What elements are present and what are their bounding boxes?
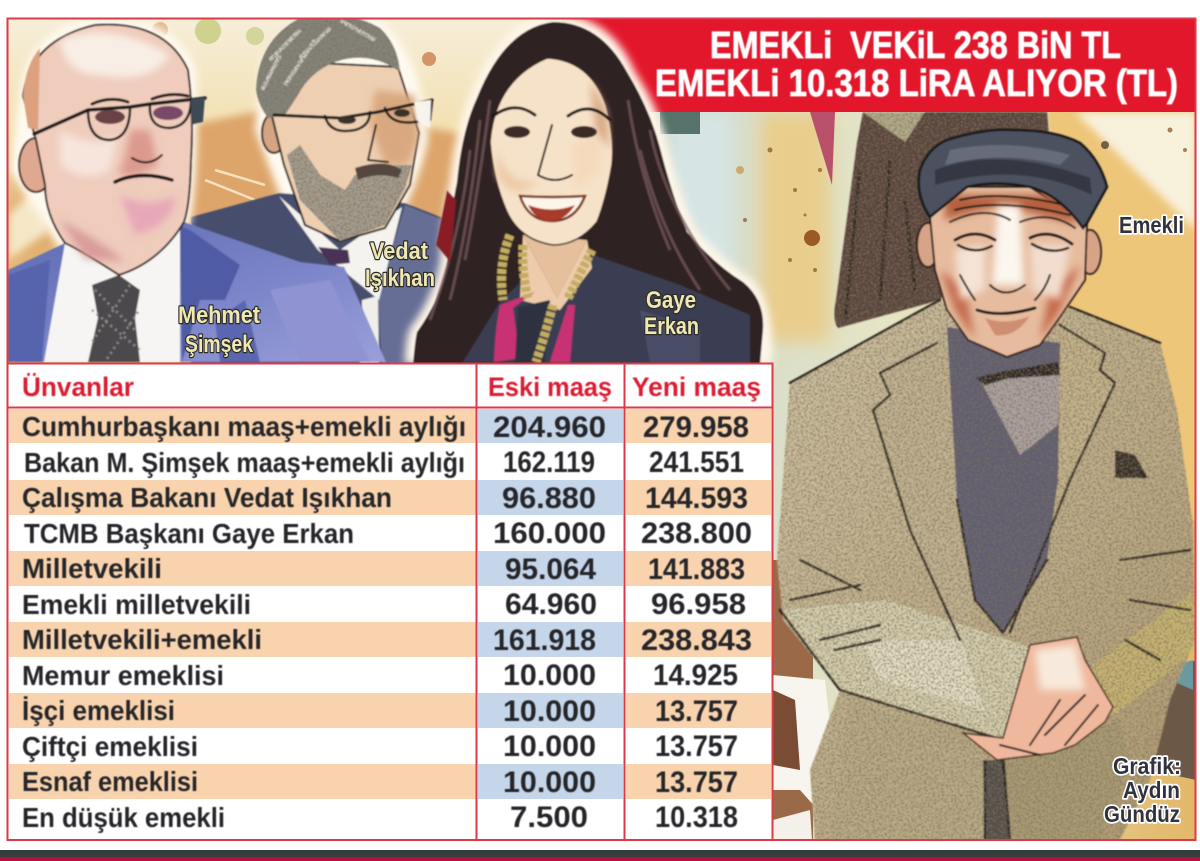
column: Yeni maaş: 279.958	[643, 411, 749, 444]
column: Eski maaş: 161.918	[493, 624, 596, 657]
table header: Ünvanlar	[22, 372, 134, 402]
credit: Grafik Aydın Gündüz	[1104, 753, 1181, 827]
label: Mehmet Şimşek: Şimşek	[185, 331, 254, 358]
jacket grain	[777, 300, 1195, 840]
column: Ünvanlar: Milletvekili	[22, 553, 162, 584]
column: Yeni maaş: 13.757	[655, 730, 738, 763]
label: Gaye Erkan: Erkan	[644, 313, 699, 340]
column: Ünvanlar: Esnaf emeklisi	[22, 766, 198, 797]
label: Gaye Erkan	[644, 287, 699, 340]
column: Ünvanlar: Milletvekili+emekli	[22, 624, 262, 655]
label: Mehmet Şimşek	[178, 302, 260, 358]
column: Ünvanlar: Memur emeklisi	[22, 660, 224, 691]
column: Yeni maaş: 141.883	[648, 553, 745, 586]
column: Eski maaş: 96.880	[502, 482, 596, 515]
column: Eski maaş: 10.000	[503, 659, 596, 692]
column: Yeni maaş	[641, 411, 752, 834]
Vedat glasses	[274, 100, 432, 131]
speckles	[736, 128, 1187, 272]
column: Ünvanlar: En düşük emekli	[22, 802, 225, 833]
column: Eski maaş: 95.064	[505, 553, 597, 586]
column: Yeni maaş: 13.757	[655, 766, 738, 799]
label: Vedat Işıkhan: Işıkhan	[365, 265, 435, 292]
column: Ünvanlar: Bakan M. Şimşek maaş+emekli aylığı	[24, 447, 465, 478]
column: Eski maaş: 162.119	[503, 446, 595, 479]
column: Yeni maaş: 96.958	[651, 588, 746, 621]
column: Eski maaş: 7.500	[510, 801, 588, 834]
column: Yeni maaş: 10.318	[655, 801, 738, 834]
label: Vedat Işıkhan: Vedat	[370, 238, 428, 265]
column: Yeni maaş: 238.800	[641, 517, 752, 550]
flat cap	[919, 130, 1107, 228]
column: Yeni maaş: 13.757	[655, 695, 738, 728]
label: Emekli: Emekli	[1119, 212, 1184, 238]
column: Eski maaş: 64.960	[505, 588, 597, 621]
ears and face	[917, 187, 1101, 357]
portrait: retiree	[777, 130, 1195, 840]
jacket	[777, 300, 1195, 840]
column: Yeni maaş: 238.843	[641, 624, 752, 657]
portrait: Mehmet Şimşek	[8, 18, 386, 362]
portrait: Vedat Işıkhan	[191, 15, 448, 364]
portrait: Gaye Erkan	[405, 14, 772, 364]
table header: Yeni maaş	[632, 372, 761, 402]
column: Ünvanlar: İşçi emeklisi	[22, 695, 175, 726]
label: Gaye Erkan: Gaye	[646, 287, 696, 314]
table grid lines	[8, 364, 772, 840]
column: Ünvanlar: Çiftçi emeklisi	[22, 731, 198, 762]
credit: Grafik Aydın Gündüz: Aydın	[1123, 777, 1180, 803]
title	[655, 25, 1178, 105]
column: Ünvanlar: TCMB Başkanı Gaye Erkan	[24, 518, 354, 549]
column: Eski maaş: 10.000	[503, 766, 596, 799]
illustration: hanging coat behind retiree	[834, 112, 1050, 328]
column: Ünvanlar: Emekli milletvekili	[22, 589, 251, 620]
column: Eski maaş: 10.000	[503, 730, 596, 763]
credit: Grafik Aydın Gündüz: Gündüz	[1104, 801, 1180, 827]
column: Eski maaş: 10.000	[503, 695, 596, 728]
panel: right illustrated backdrop	[640, 110, 1196, 840]
hands	[963, 637, 1113, 760]
table background	[8, 364, 772, 840]
column: Eski maaş	[493, 411, 606, 834]
table: salaries	[8, 364, 772, 840]
column: Ünvanlar: Cumhurbaşkanı maaş+emekli aylığı	[22, 411, 466, 442]
column: Yeni maaş: 241.551	[649, 446, 744, 479]
column: Eski maaş: 160.000	[493, 517, 606, 550]
title: EMEKLi VEKiL 238 BiN TL	[710, 25, 1121, 67]
credit: Grafik Aydın Gündüz: Grafik:	[1113, 753, 1181, 779]
column: Ünvanlar	[22, 411, 466, 833]
column: Ünvanlar: Çalışma Bakanı Vedat Işıkhan	[22, 482, 392, 513]
table header	[22, 372, 761, 402]
panel: left illustrated backdrop	[8, 18, 578, 364]
Mehmet glasses	[34, 95, 205, 140]
column: Yeni maaş: 144.593	[645, 482, 748, 515]
column: Yeni maaş: 14.925	[653, 659, 738, 692]
header banner shape	[560, 19, 1196, 112]
label: Vedat Işıkhan	[365, 238, 435, 292]
table row stripes	[9, 409, 771, 799]
table header: Eski maaş	[488, 372, 612, 402]
column: Eski maaş: 204.960	[493, 411, 606, 444]
vest and shirt	[947, 327, 1060, 840]
label: Mehmet Şimşek: Mehmet	[178, 302, 260, 329]
bottom strip	[0, 850, 1200, 861]
